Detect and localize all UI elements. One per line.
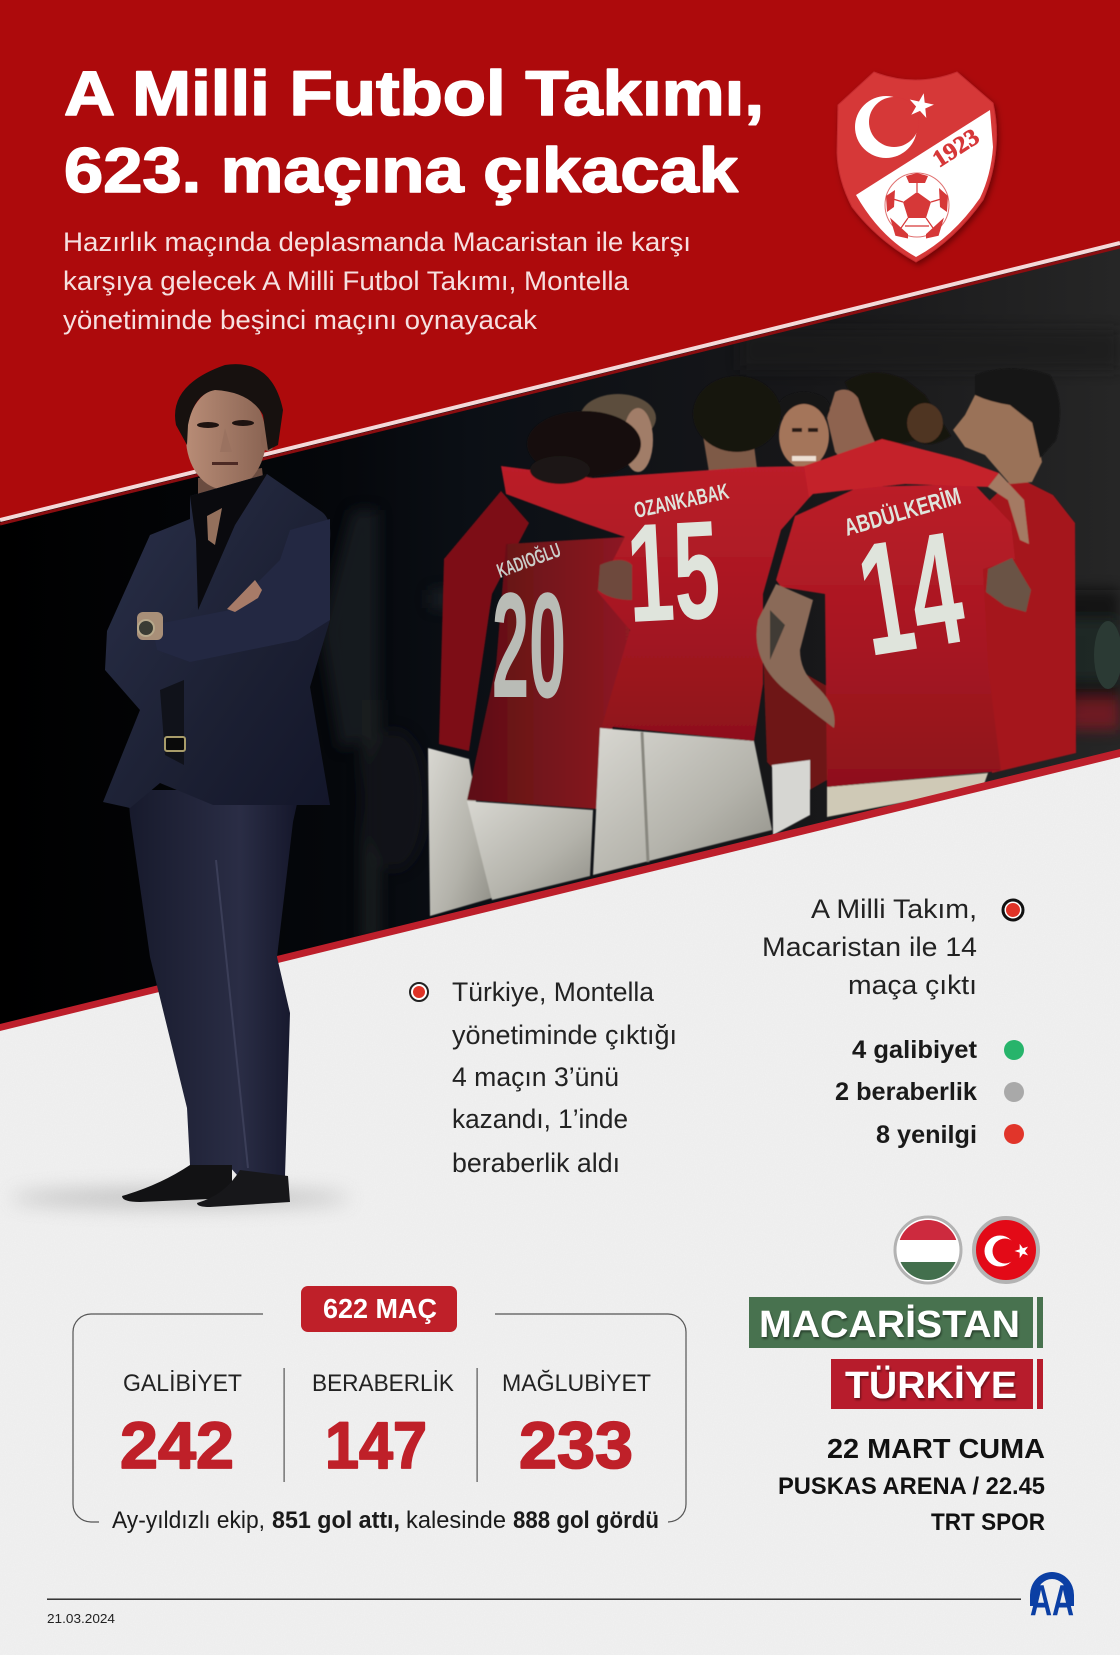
matches badge: 622 MAÇ	[323, 1293, 437, 1324]
column values: 147	[325, 1408, 427, 1482]
goals sentence: kalesinde	[406, 1507, 506, 1534]
subtitle: karşıya gelecek A Milli Futbol Takımı, Montella	[63, 266, 630, 296]
ponytail player head	[826, 372, 951, 455]
player 15 head	[693, 376, 781, 478]
head-to-head copy: Macaristan ile 14	[762, 932, 977, 962]
right player shirt	[978, 476, 1076, 773]
player group	[428, 368, 1076, 916]
shirt names and numbers: 14	[847, 497, 974, 690]
crossed arm	[152, 519, 330, 662]
federation crest	[837, 72, 997, 262]
tattooed arm	[757, 584, 835, 728]
result list	[835, 1036, 978, 1149]
shirt names and numbers: OZANKABAK	[632, 478, 731, 523]
bullet text: Montella record	[410, 977, 677, 1178]
founding year: 1923	[928, 124, 984, 173]
match details	[778, 1433, 1045, 1536]
Anadolu Agency logo: AA	[1030, 1576, 1074, 1625]
Anadolu Agency logo	[1030, 1572, 1074, 1625]
column values: 242	[120, 1408, 234, 1482]
shirt names and numbers	[494, 483, 965, 698]
bullet copy: beraberlik aldı	[452, 1148, 620, 1178]
player 15 shorts	[593, 728, 772, 875]
ground shadow	[10, 1189, 350, 1207]
red header panel	[0, 0, 1120, 520]
football	[885, 173, 949, 237]
trousers	[128, 790, 300, 1176]
embracing arm	[804, 439, 999, 498]
camera equipment	[1094, 621, 1120, 689]
bullet copy: 4 maçın 3’ünü	[452, 1062, 619, 1092]
shirt names and numbers: ABDÜLKERİM	[841, 483, 964, 542]
shoes	[122, 1165, 290, 1207]
player 15 shirt	[501, 466, 809, 741]
panel outline	[73, 1314, 686, 1522]
right player head	[953, 368, 1060, 484]
footer rule	[47, 1598, 1021, 1600]
red dot	[1004, 1124, 1024, 1144]
goals sentence: Ay-yıldızlı ekip,	[112, 1507, 265, 1534]
result list: 8 yenilgi	[876, 1121, 977, 1149]
crescent	[855, 96, 919, 158]
grey dot	[1004, 1082, 1024, 1102]
lower diagonal red stripe	[0, 749, 1120, 1031]
title	[64, 59, 764, 206]
blond player head	[580, 394, 656, 472]
head-to-head copy	[762, 894, 977, 1000]
team banner: Türkiye	[831, 1359, 1043, 1409]
player 14 shirt	[776, 484, 1015, 787]
subtitle: Hazırlık maçında deplasmanda Macaristan ile karşı	[63, 227, 691, 257]
player 14 shorts	[827, 773, 988, 817]
date: 21.03.2024	[47, 1611, 115, 1626]
match details: 22 MART CUMA	[827, 1433, 1045, 1464]
player 20 shorts	[467, 801, 593, 900]
curly hair player head	[527, 411, 641, 484]
title: A Milli Futbol Takımı,	[64, 59, 764, 129]
head-to-head with Hungary	[762, 894, 1024, 1149]
head-to-head copy: maça çıktı	[848, 970, 977, 1000]
bullet icon	[1003, 900, 1023, 920]
rear player shirt	[439, 491, 529, 751]
bright gap behind shorts	[772, 760, 810, 835]
column headings: GALİBİYET	[123, 1370, 242, 1397]
result list: 2 beraberlik	[835, 1078, 977, 1106]
matches badge	[301, 1286, 457, 1332]
team banner: Macaristan: MACARİSTAN	[759, 1304, 1020, 1346]
all-time record panel	[73, 1286, 686, 1534]
column headings	[123, 1370, 651, 1397]
corner flag post in background	[320, 330, 1120, 940]
column values: 233	[519, 1408, 633, 1482]
white lower field	[856, 110, 993, 257]
goals sentence: 888 gol gördü	[513, 1507, 659, 1534]
hand on player 20	[598, 560, 632, 600]
flag: Hungary	[895, 1217, 961, 1284]
team banner: Türkiye: TÜRKİYE	[845, 1364, 1017, 1407]
smiling player head	[778, 392, 830, 468]
head	[175, 364, 283, 520]
shirt opening	[190, 474, 267, 610]
match details: PUSKAS ARENA / 22.45	[778, 1473, 1045, 1500]
bullet copy: Türkiye, Montella	[452, 977, 655, 1007]
star	[907, 91, 936, 119]
subtitle: yönetiminde beşinci maçını oynayacak	[63, 305, 538, 335]
result list: 4 galibiyet	[852, 1036, 978, 1064]
upper diagonal stripe	[0, 243, 1120, 524]
title: 623. maçına çıkacak	[64, 136, 739, 206]
column headings: MAĞLUBİYET	[502, 1370, 651, 1397]
bullet copy	[452, 977, 677, 1178]
coach standing	[10, 364, 350, 1207]
subtitle	[63, 227, 691, 335]
shirt names and numbers: 20	[492, 561, 566, 729]
goals sentence	[112, 1507, 659, 1534]
rear player shorts	[428, 748, 492, 916]
column headings: BERABERLİK	[312, 1370, 454, 1397]
match details: TRT SPOR	[931, 1509, 1045, 1536]
inner shirt and belt	[160, 680, 184, 765]
player 20 shirt	[467, 537, 630, 809]
shirt names and numbers: 15	[623, 490, 723, 652]
jacket	[103, 474, 330, 808]
shirt names and numbers: KADIOĞLU	[494, 538, 564, 583]
forearm on right	[988, 473, 1029, 544]
head-to-head copy: A Milli Takım,	[811, 894, 977, 924]
hand	[227, 580, 262, 612]
flag: Turkey	[974, 1218, 1038, 1282]
column values	[120, 1408, 633, 1482]
photo band: national team players celebrating	[0, 240, 1120, 1040]
bullet copy: yönetiminde çıktığı	[452, 1020, 677, 1050]
goals sentence: 851 gol attı,	[272, 1507, 400, 1534]
bullet icon	[410, 983, 428, 1001]
shield	[837, 72, 997, 262]
wrist watch	[137, 612, 163, 640]
green dot	[1004, 1040, 1024, 1060]
dark shirt between players	[763, 664, 828, 790]
bullet copy: kazandı, 1’inde	[452, 1104, 628, 1134]
